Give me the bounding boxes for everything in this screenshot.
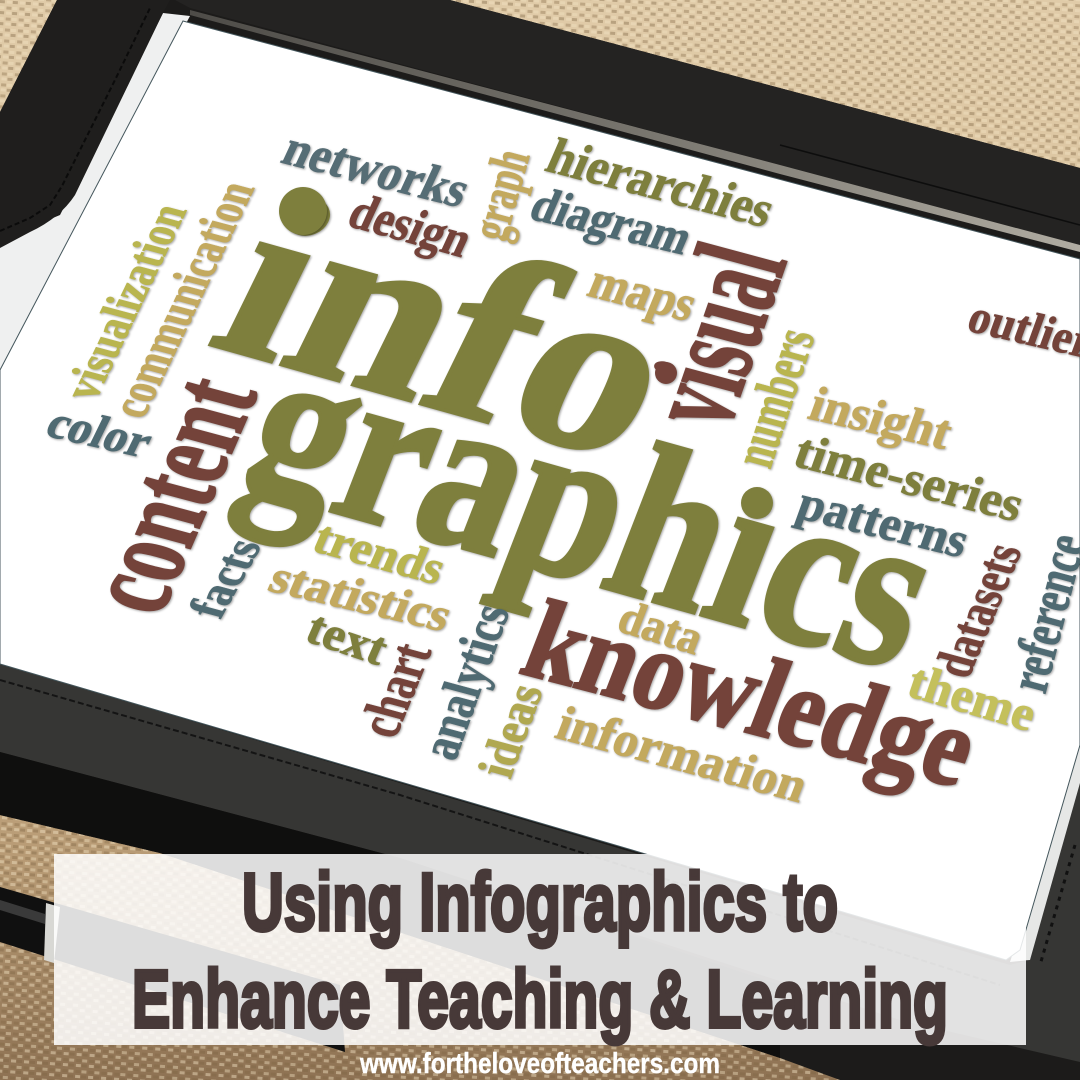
word: theme: theme bbox=[901, 654, 1043, 742]
icon: dot of the i in visual bbox=[655, 362, 677, 384]
icon: dot of the i in graphics bbox=[741, 487, 773, 519]
word: hierarchies: hierarchies bbox=[538, 129, 783, 238]
word: maps: maps bbox=[580, 254, 705, 332]
website url: www.fortheloveofteachers.com bbox=[359, 1048, 720, 1080]
word: info: info bbox=[181, 147, 719, 509]
word: chart: chart bbox=[345, 636, 445, 743]
word: content: content bbox=[56, 364, 284, 625]
word: visualization: visualization bbox=[52, 198, 198, 405]
pen bbox=[0, 887, 345, 1052]
word: diagram: diagram bbox=[523, 177, 701, 265]
word: knowledge: knowledge bbox=[508, 577, 994, 810]
title panel bbox=[54, 854, 1026, 1045]
icon: dot of the i in info bbox=[279, 187, 327, 235]
word: facts: facts bbox=[177, 533, 273, 623]
word: text: text bbox=[299, 601, 396, 676]
word: datasets: datasets bbox=[922, 537, 1034, 683]
word cloud bbox=[38, 121, 1080, 813]
word: time-series: time-series bbox=[787, 423, 1031, 532]
word: communication: communication bbox=[100, 176, 266, 423]
word: color: color bbox=[38, 397, 161, 468]
word: ideas: ideas bbox=[467, 678, 554, 783]
word: patterns: patterns bbox=[790, 475, 976, 568]
word: analytics: analytics bbox=[409, 598, 521, 765]
headline words bbox=[181, 147, 970, 716]
icon: white mask over default i dot bbox=[753, 466, 799, 512]
word: graph: graph bbox=[459, 143, 541, 246]
word: trends: trends bbox=[306, 511, 453, 595]
word: data: data bbox=[611, 591, 710, 665]
word: visual: visual bbox=[616, 230, 815, 441]
word: graphics: graphics bbox=[217, 298, 970, 716]
word: statistics: statistics bbox=[262, 551, 460, 642]
word: design: design bbox=[340, 184, 481, 268]
title bbox=[132, 857, 948, 1045]
word: information: information bbox=[549, 696, 815, 813]
title line 1: Using Infographics to bbox=[242, 857, 838, 948]
word: numbers: numbers bbox=[720, 322, 827, 473]
case flap bbox=[0, 0, 170, 248]
word: insight: insight bbox=[802, 376, 960, 460]
word: networks: networks bbox=[274, 121, 478, 218]
